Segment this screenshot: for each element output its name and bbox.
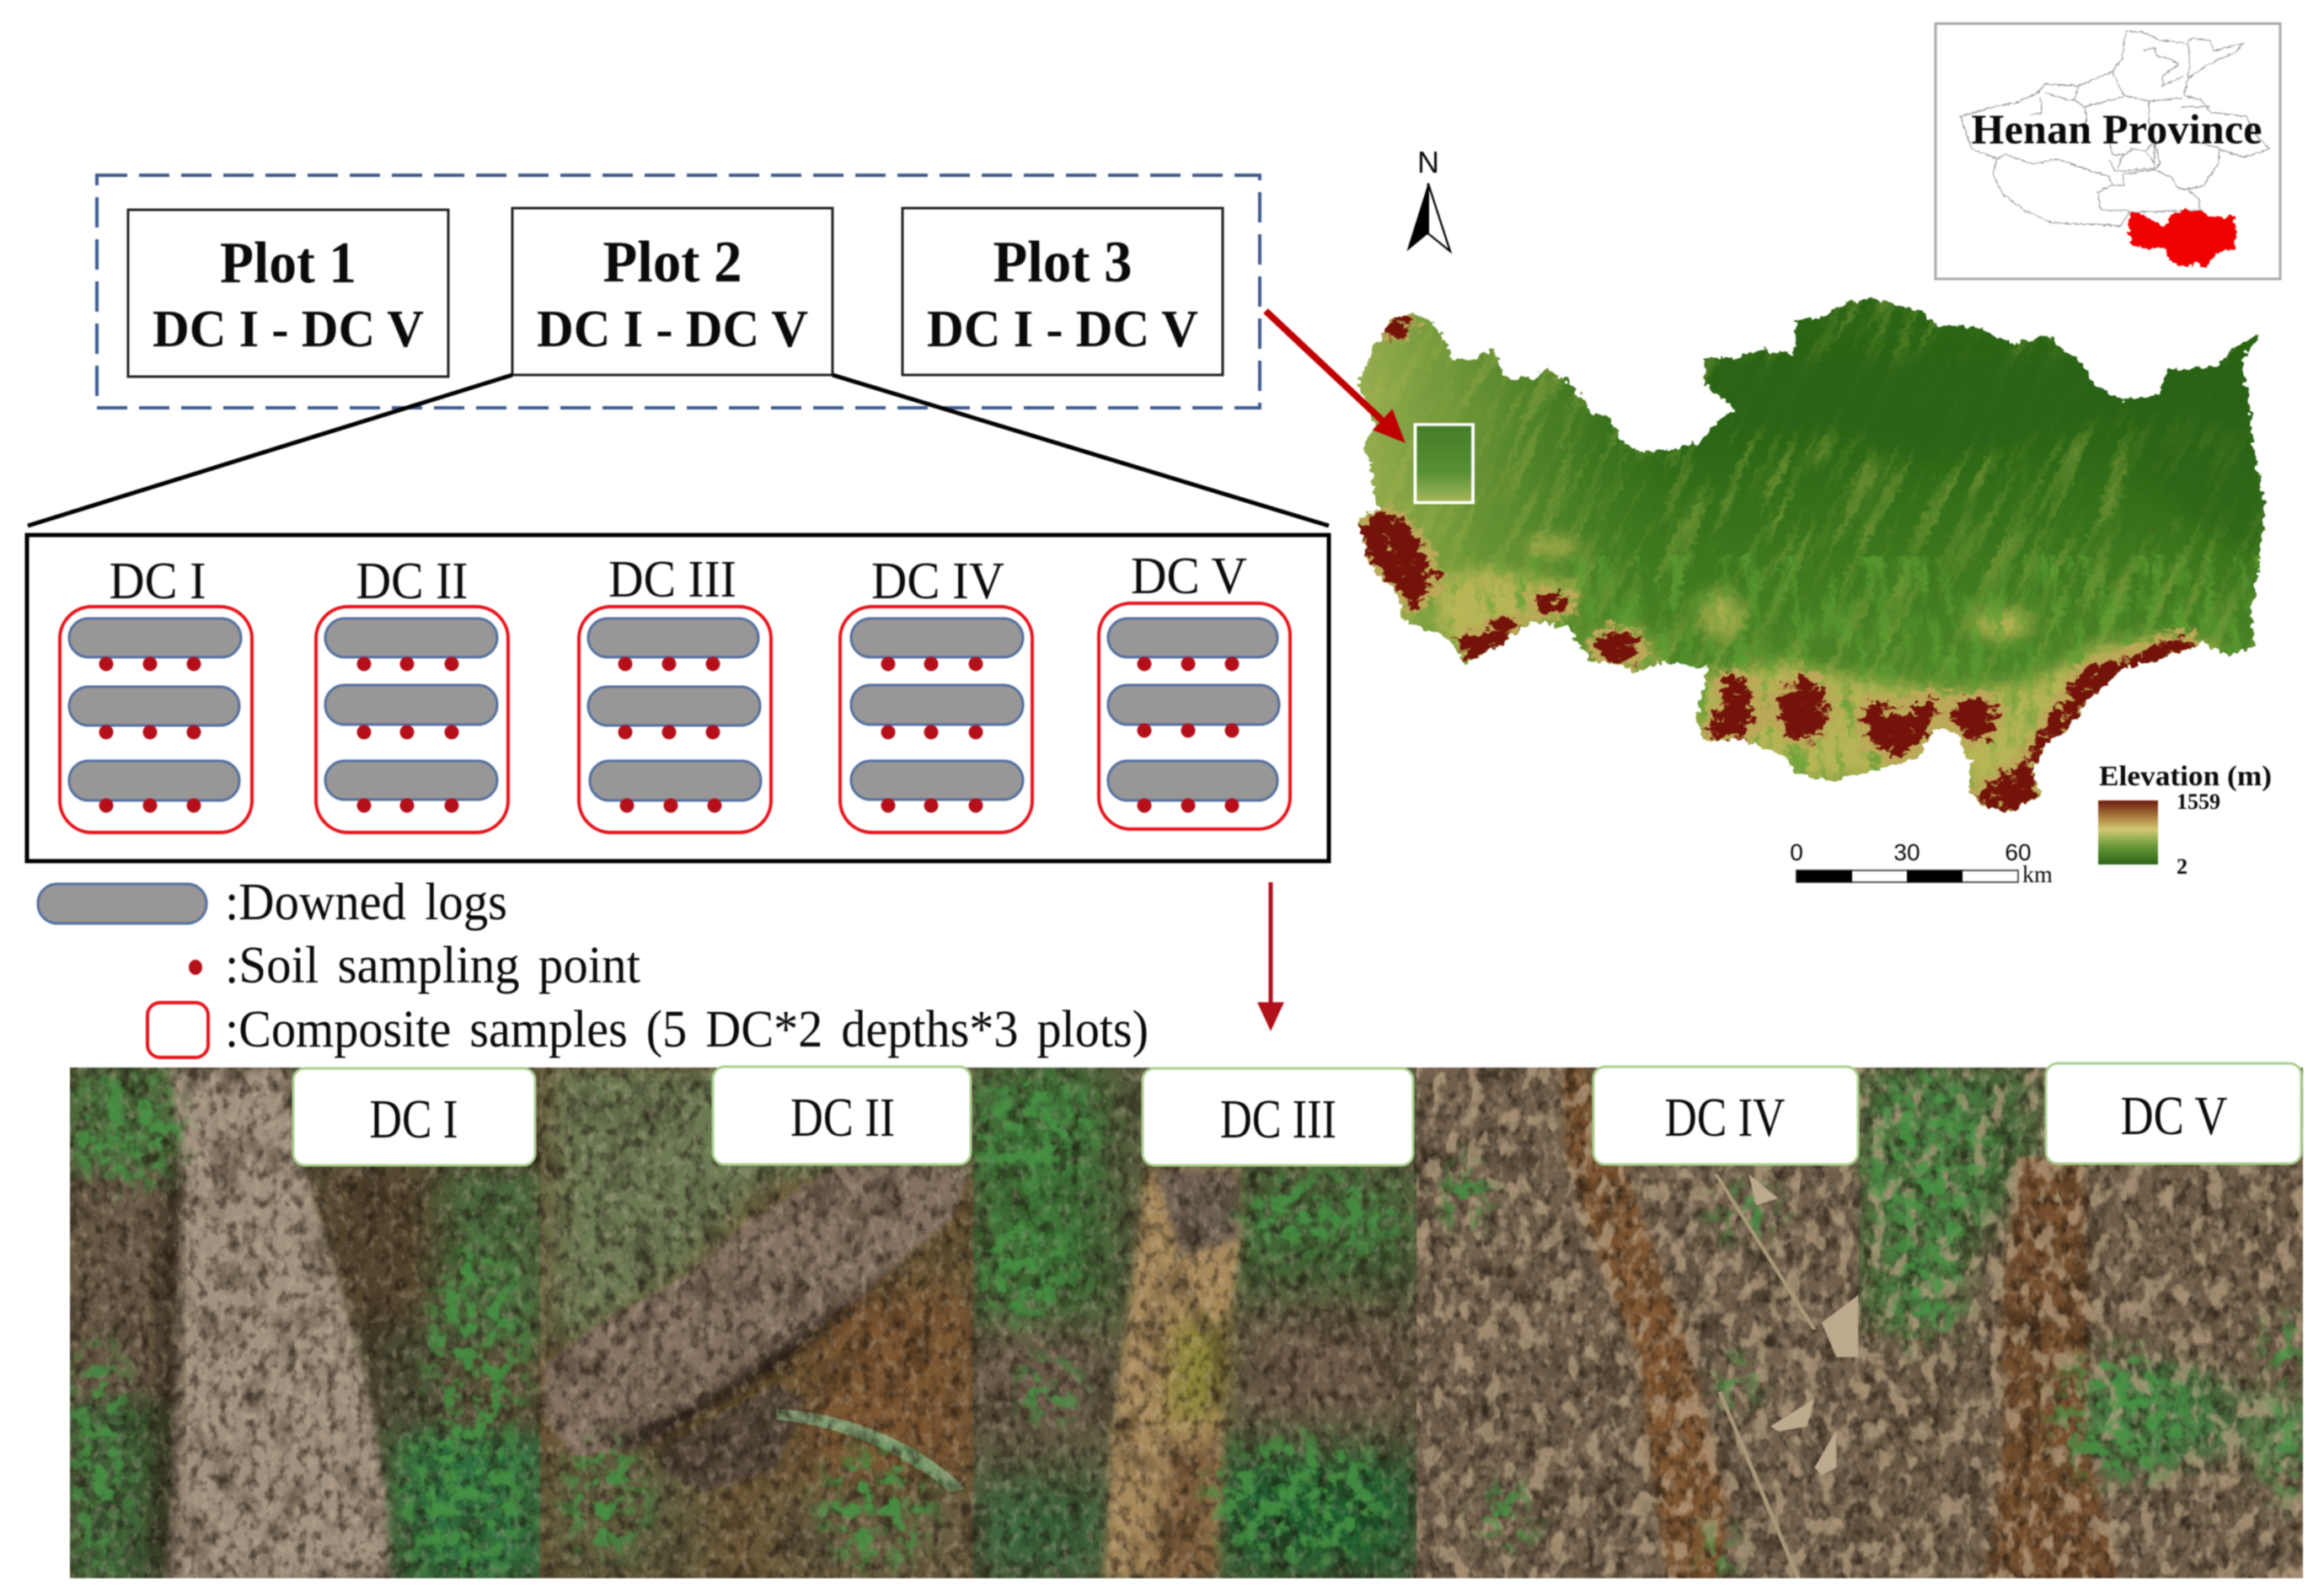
arrow: plots to map [1266, 311, 1404, 442]
inset province map [1961, 31, 2269, 270]
column: DC I [60, 553, 252, 832]
box: Plot 3 [902, 208, 1223, 375]
photo: DC IV log [1416, 1067, 1858, 1582]
photo: DC II log [540, 1067, 979, 1585]
label: DC IV: DC IV [1665, 1087, 1785, 1148]
panel: plots in dashed frame [97, 175, 1260, 408]
label: DC III [1143, 1068, 1413, 1165]
legend: downed logs [38, 874, 507, 931]
box: Plot 1 [128, 210, 448, 377]
column: DC III: DC III [608, 551, 736, 608]
north arrow [1406, 145, 1450, 251]
dashed frame [97, 175, 1260, 408]
box: Plot 1: DC I - DC V [153, 301, 424, 358]
column: DC I: DC I [110, 553, 206, 610]
box: Plot 3: DC I - DC V [927, 301, 1198, 358]
box: Plot 2: Plot 2 [603, 230, 742, 295]
photo: DC I log [65, 1067, 551, 1585]
zoom lines from Plot 2 [28, 375, 1329, 526]
frame [27, 535, 1329, 861]
photo DC IV sticks and leaves [1716, 1175, 1858, 1582]
label: DC III: DC III [1220, 1089, 1336, 1150]
photo: DC V log [1858, 1067, 2303, 1582]
photo textures [70, 1068, 2303, 1578]
label: DC I [293, 1068, 535, 1165]
column: DC V: DC V [1131, 548, 1247, 605]
study site marker [1415, 425, 1473, 503]
column: DC V [1099, 548, 1290, 829]
column: DC IV: DC IV [871, 553, 1004, 610]
legend: downed logs: :Downed logs [225, 874, 507, 931]
column: DC III [579, 551, 771, 832]
scale bar [1790, 839, 2053, 888]
elevation legend: Elevation (m) [2099, 761, 2272, 792]
column: DC II: DC II [356, 553, 469, 610]
elevation map [1356, 297, 2268, 814]
elevation legend: 2 [2177, 854, 2187, 879]
photo: DC III log [973, 1068, 1416, 1578]
label: DC II: DC II [790, 1087, 895, 1148]
legend: soil sampling point: :Soil sampling point [225, 937, 640, 994]
box: Plot 2 [512, 208, 833, 375]
scale bar: 0 [1790, 839, 1803, 865]
inset: Henan Province [1936, 24, 2280, 279]
column: DC II [316, 553, 508, 832]
inset: Henan Province: Henan Province [1972, 105, 2262, 153]
column: DC IV [840, 553, 1032, 832]
box: Plot 2: DC I - DC V [537, 301, 808, 358]
box: Plot 1: Plot 1 [220, 231, 356, 296]
label: DC V: DC V [2120, 1085, 2228, 1147]
scale bar: km [2022, 862, 2053, 888]
north arrow: N [1417, 145, 1439, 179]
arrow: layout to photos [1261, 882, 1281, 1026]
panel: photos [65, 1063, 2303, 1585]
box: Plot 3: Plot 3 [993, 230, 1133, 295]
elevation legend: 1559 [2177, 789, 2220, 814]
elevation legend [2098, 761, 2272, 879]
scale bar: 30 [1893, 839, 1920, 865]
label: DC I: DC I [369, 1089, 458, 1150]
label: DC V [2046, 1063, 2301, 1164]
panel: decay class layout [27, 535, 1329, 861]
scale bar: 60 [2005, 839, 2032, 865]
label: DC II [713, 1067, 971, 1164]
legend: composite samples: :Composite samples (5 DC*2 depths*3 plots) [225, 1001, 1149, 1058]
label: DC IV [1593, 1067, 1858, 1164]
legend [38, 874, 1149, 1058]
